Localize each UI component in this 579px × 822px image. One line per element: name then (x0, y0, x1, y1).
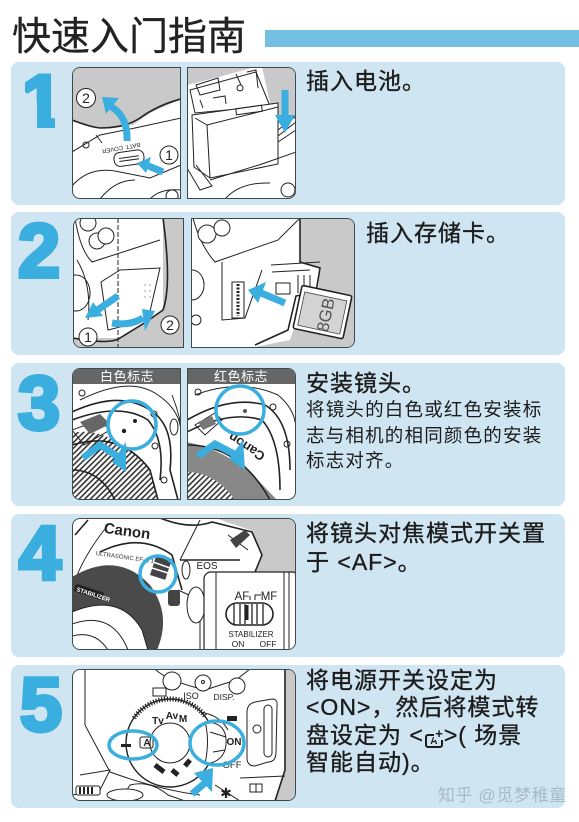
switch ring (140, 556, 176, 592)
panel: step 1 (11, 62, 565, 205)
photo: power and mode dial: Tv (152, 716, 164, 727)
photo: power and mode dial (72, 669, 296, 801)
panel: step 3 (11, 363, 565, 506)
photo: open battery door: BATT. COVER (101, 141, 141, 153)
photo: inserting battery (187, 67, 296, 199)
photo: open battery door: 1 (165, 147, 173, 163)
step numbers: 2 (18, 209, 60, 294)
icon: 8GB card (293, 285, 352, 339)
rings (109, 731, 157, 759)
text: step 5: 将电源开关设定为 (306, 667, 498, 693)
card slot cover (247, 699, 277, 766)
text: step 2: 插入存储卡。 (366, 220, 510, 246)
photo: focus mode switch: ULTRASONIC EF-S 18-55 (95, 551, 167, 567)
photo: red mark alignment: 红色标志 (214, 369, 268, 384)
label bar (187, 368, 296, 384)
photo: focus mode switch: AF (235, 591, 249, 603)
description: 将镜头的白色或红色安装标 (306, 399, 542, 420)
step numbers (17, 74, 63, 734)
arrow: push card (261, 293, 285, 303)
photo: focus mode switch (72, 518, 296, 650)
photo: white mark alignment (72, 368, 181, 500)
photo: focus mode switch: Canon (103, 520, 151, 543)
panel: step 4 (11, 514, 565, 657)
photo: power and mode dial: OFF (222, 760, 242, 771)
text: step 5: 智能自动)。 (306, 749, 435, 775)
description (306, 399, 542, 471)
text: step 5: 盘设定为 < >( 场景 (306, 722, 522, 748)
photo: power and mode dial: ON (226, 737, 242, 748)
photo: power and mode dial: ✱ (220, 785, 232, 801)
text: step 4: 于 <AF>。 (306, 549, 422, 575)
photo: red mark alignment: Canon (225, 429, 268, 464)
mark ring (216, 386, 264, 434)
photo: open battery door: 2 (82, 90, 90, 106)
panel: step 5 (11, 665, 565, 808)
icon: 8GB card: 8GB (313, 296, 339, 334)
photo: focus mode switch: STABILIZER (228, 630, 274, 639)
panel: step 2 (11, 212, 565, 355)
photo: focus mode switch: EOS (196, 561, 218, 572)
heading: 安装镜头。 (306, 370, 426, 396)
watermark: 知乎 @觅梦稚童 (438, 786, 567, 805)
text: step 4: 将镜头对焦模式开关置 (306, 520, 546, 546)
label bar (72, 368, 181, 384)
text: step 5: + (435, 726, 443, 741)
text: step 5: <ON>，然后将模式转 (306, 694, 539, 720)
inset: AF/MF switch (204, 572, 299, 657)
photo: focus mode switch: ON (232, 639, 244, 649)
photo: power and mode dial: ISO (183, 691, 199, 701)
text: step 1: 插入电池。 (306, 68, 426, 94)
lens (72, 565, 163, 650)
text: step 4 (306, 520, 546, 575)
photo: white mark alignment: 白色标志 (100, 369, 154, 384)
step numbers: 3 (18, 361, 60, 446)
photo: power and mode dial: Av (166, 711, 179, 722)
photo: power and mode dial: M (179, 714, 187, 725)
photo: focus mode switch: MF (261, 591, 277, 603)
photo: red mark alignment (187, 368, 296, 500)
photo: open card slot: 1 (84, 329, 92, 345)
text: step 5 (306, 667, 539, 776)
photo: inserting card (191, 218, 355, 348)
description: 标志对齐。 (306, 450, 405, 471)
arrow: open door (112, 318, 143, 324)
photo: power and mode dial: A (143, 738, 151, 749)
wheel (76, 786, 100, 795)
arrow: slide door (96, 296, 118, 311)
mode dial (126, 699, 214, 787)
photo: power and mode dial: DISP. (213, 692, 235, 702)
arrow: slide latch (146, 165, 163, 172)
switch detail (150, 554, 172, 580)
arrow: switch on (192, 782, 206, 794)
photo: open battery door (72, 67, 181, 199)
description: 志与相机的相同颜色的安装 (306, 424, 542, 446)
power switch (205, 722, 226, 764)
text: step 3 (306, 370, 542, 471)
photo: focus mode switch: STABILIZER (75, 587, 111, 604)
step numbers: 5 (20, 663, 62, 748)
title accent bar (265, 30, 579, 47)
arrow: rotate lens (198, 444, 238, 456)
step numbers: 4 (19, 511, 61, 596)
buttons (163, 672, 181, 690)
mark ring (108, 401, 156, 449)
step numbers: 1 (21, 60, 63, 145)
photo: focus mode switch: OFF (260, 639, 276, 649)
arrow: lift door (110, 106, 127, 141)
arrow: insert battery (282, 90, 288, 118)
arrow: rotate lens (83, 445, 120, 458)
photo: open card slot (73, 218, 184, 348)
photo: open card slot: 2 (166, 317, 174, 333)
text: step 5: A (430, 736, 437, 747)
title: 快速入门指南 (12, 16, 246, 59)
